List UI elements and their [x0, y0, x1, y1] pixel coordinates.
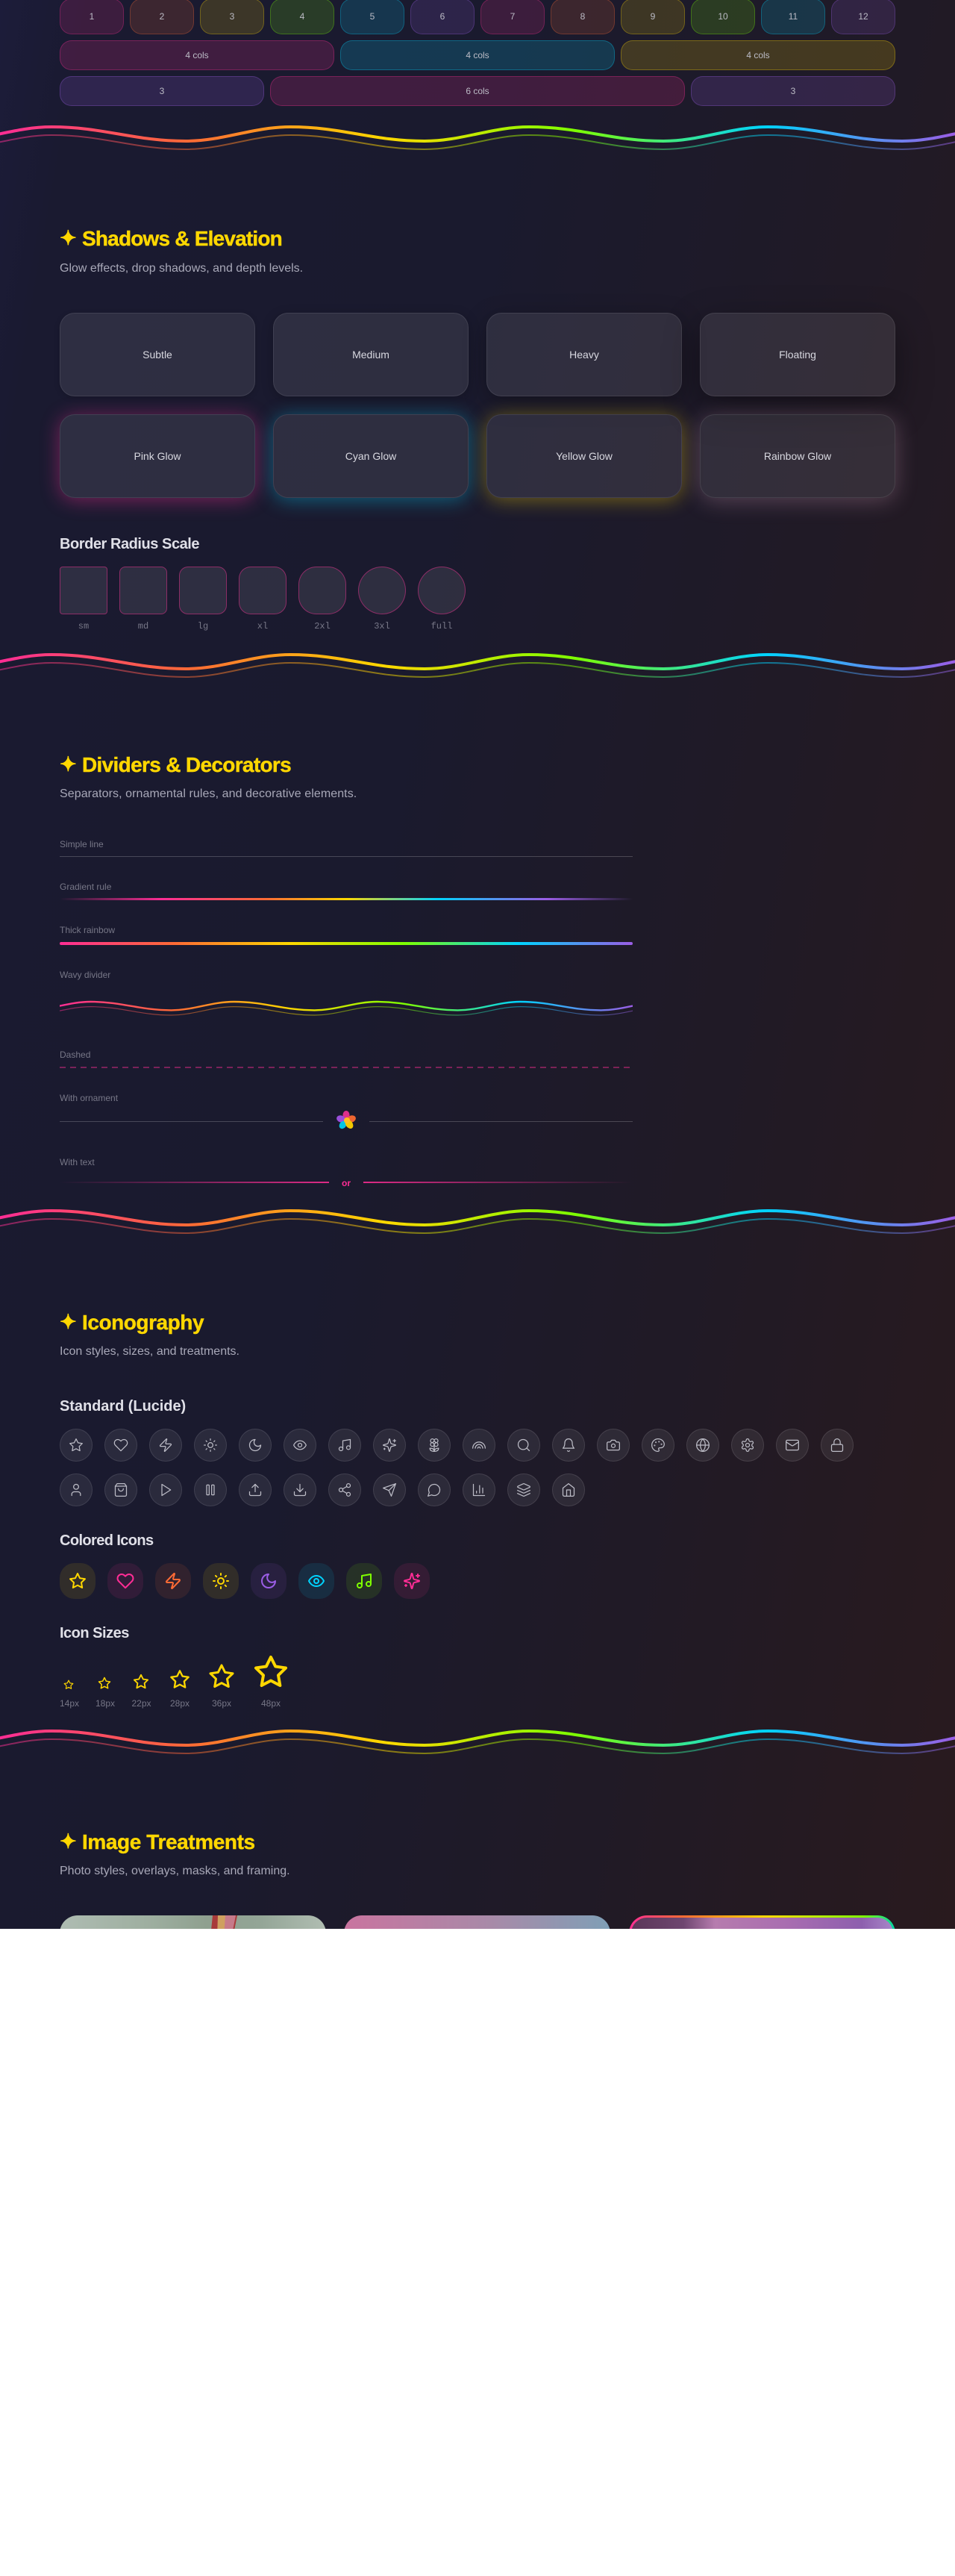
label 48px: 48px: [261, 1698, 281, 1709]
card: Pink Glow: Pink Glow: [134, 450, 181, 462]
radius label sm: sm: [78, 621, 89, 631]
icon: bar chart: [463, 1473, 495, 1506]
card: Heavy: [486, 313, 682, 396]
radius label full: full: [431, 621, 452, 631]
icon: home: [552, 1473, 585, 1506]
panel: border radius scale: [60, 567, 466, 631]
panel: grid columns demo: [60, 0, 895, 106]
colored icon: music: [346, 1563, 382, 1599]
colored icon: sparkles: [394, 1563, 430, 1599]
grid cell 3: 3: [230, 11, 234, 22]
icon: camera: [597, 1429, 630, 1462]
grid cell 8: 8: [580, 11, 585, 22]
icon: pause: [194, 1473, 227, 1506]
heading: Standard (Lucide): Standard (Lucide): [60, 1398, 186, 1415]
colored icon: star: [60, 1563, 96, 1599]
divider: thick rainbow: [60, 942, 633, 945]
divider: dashed: [60, 1067, 633, 1068]
icon: message circle: [418, 1473, 451, 1506]
heading: Dividers & Decorators: Dividers & Decorators: [82, 753, 291, 776]
grid cell 4: [270, 0, 334, 34]
label: wavy divider: Wavy divider: [60, 970, 110, 980]
grid cell 4 cols yellow: [621, 40, 895, 70]
icon: heart: [104, 1429, 137, 1462]
wavy section divider 1: [0, 125, 955, 150]
panel: icon sizes: [60, 1656, 287, 1709]
grid cell 9: 9: [651, 11, 655, 22]
grid cell 4 cols yellow: 4 cols: [746, 50, 770, 60]
subtitle: dividers: Separators, ornamental rules, and decorative elements.: [60, 788, 357, 800]
grid cell 3: [200, 0, 264, 34]
grid cell 1: 1: [90, 11, 94, 22]
grid cell 5: 5: [370, 11, 375, 22]
grid cell 2: [130, 0, 194, 34]
icon: zap: [149, 1429, 182, 1462]
label 28px: 28px: [170, 1698, 190, 1709]
icon: bell: [552, 1429, 585, 1462]
radius swatch full: [418, 567, 466, 614]
icon: music: [328, 1429, 361, 1462]
heading: Border Radius Scale: Border Radius Scale: [60, 536, 199, 552]
icon: shopping bag: [104, 1473, 137, 1506]
panel: shadow cards: [48, 313, 906, 512]
heading: Shadows & Elevation: Shadows & Elevation: [82, 227, 282, 250]
image card: natural photo: [60, 1915, 326, 2065]
radius swatch lg: [179, 567, 227, 614]
star 18px: [98, 1677, 110, 1688]
heading: Shadows & Elevation: ✦: [60, 227, 77, 250]
card: Yellow Glow: Yellow Glow: [556, 450, 613, 462]
subtitle: icons: Icon styles, sizes, and treatments.: [60, 1345, 239, 1358]
grid cell 12: [831, 0, 895, 34]
colored icon: sun: [203, 1563, 239, 1599]
icon: rainbow flower ornament: [336, 1111, 356, 1129]
icon: upload: [239, 1473, 272, 1506]
grid cell 1: [60, 0, 124, 34]
heading: Icon Sizes: Icon Sizes: [60, 1625, 129, 1641]
icon: palette: [642, 1429, 674, 1462]
icon: globe: [686, 1429, 719, 1462]
wavy section divider 4: [0, 1730, 955, 1754]
grid cell 6: 6: [440, 11, 445, 22]
icon: play: [149, 1473, 182, 1506]
colored icon: eye: [298, 1563, 334, 1599]
radius label xl: xl: [257, 621, 268, 631]
icon: moon: [239, 1429, 272, 1462]
heading: Iconography: Iconography: [82, 1311, 204, 1334]
card: Cyan Glow: Cyan Glow: [345, 450, 396, 462]
grid cell 3 right: [691, 76, 895, 106]
grid cell 9: [621, 0, 685, 34]
grid cell 7: 7: [510, 11, 515, 22]
divider: simple line: [60, 856, 633, 857]
star 14px: [64, 1680, 73, 1689]
card: Pink Glow: [60, 414, 255, 498]
radius swatch 2xl: [298, 567, 346, 614]
panel: standard icon grid: [60, 1429, 854, 1506]
subtitle: shadows: Glow effects, drop shadows, and depth levels.: [60, 262, 303, 275]
icon: sparkles: [373, 1429, 406, 1462]
divider text: or: or: [342, 1178, 351, 1188]
grid cell 6: [410, 0, 475, 34]
panel: colored icons: [60, 1563, 430, 1599]
card: Subtle: [60, 313, 255, 396]
subtitle: images: Photo styles, overlays, masks, and framing.: [60, 1865, 290, 1877]
card: Heavy: Heavy: [569, 349, 599, 361]
grid cell 12: 12: [858, 11, 868, 22]
divider: with ornament: [60, 1111, 633, 1129]
icon: mail: [776, 1429, 809, 1462]
grid cell 11: [761, 0, 825, 34]
star 48px: [254, 1656, 287, 1687]
grid cell 10: [691, 0, 755, 34]
grid cell 4: 4: [300, 11, 304, 22]
heading: Image Treatments: Image Treatments: [82, 1830, 255, 1853]
radius swatch 3xl: [358, 567, 406, 614]
image card: gradient overlay: [344, 1915, 610, 2065]
star 22px: [133, 1674, 149, 1688]
colored icon: moon: [251, 1563, 286, 1599]
grid cell 8: [551, 0, 615, 34]
radius label lg: lg: [198, 621, 208, 631]
card: Subtle: Subtle: [143, 349, 172, 361]
grid cell 4 cols pink: [60, 40, 334, 70]
icon: lock: [821, 1429, 854, 1462]
label 36px: 36px: [212, 1698, 231, 1709]
card: Floating: [700, 313, 895, 396]
grid cell 3 left: 3: [160, 86, 164, 96]
label: dashed: Dashed: [60, 1050, 90, 1060]
heading: Colored Icons: Colored Icons: [60, 1532, 154, 1549]
icon: layers: [507, 1473, 540, 1506]
label: thick rainbow: Thick rainbow: [60, 925, 115, 935]
icon: send: [373, 1473, 406, 1506]
icon: star: [60, 1429, 93, 1462]
grid cell 4 cols cyan: 4 cols: [466, 50, 489, 60]
heading: Iconography: ✦: [60, 1311, 77, 1334]
radius swatch sm: [60, 567, 107, 614]
grid cell 4 cols cyan: [340, 40, 615, 70]
grid cell 5: [340, 0, 404, 34]
grid cell 6 cols: [270, 76, 685, 106]
grid cell 3 left: [60, 76, 264, 106]
card: Cyan Glow: [273, 414, 469, 498]
divider: gradient rule: [60, 898, 633, 900]
colored icon: heart: [107, 1563, 143, 1599]
wavy section divider 2: [0, 653, 955, 678]
icon: user: [60, 1473, 93, 1506]
colored icon: zap: [155, 1563, 191, 1599]
star 36px: [209, 1664, 234, 1688]
radius label 3xl: 3xl: [374, 621, 390, 631]
grid cell 10: 10: [718, 11, 728, 22]
radius label 2xl: 2xl: [314, 621, 331, 631]
icon: eye: [284, 1429, 316, 1462]
card: Rainbow Glow: [700, 414, 895, 498]
star 28px: [170, 1670, 190, 1688]
icon: sun: [194, 1429, 227, 1462]
icon: share: [328, 1473, 361, 1506]
card: Medium: Medium: [352, 349, 389, 361]
framed photo: [631, 1918, 893, 2062]
image card: rainbow frame: [629, 1915, 895, 2065]
heading: Image Treatments: ✦: [60, 1830, 77, 1853]
card: Floating: Floating: [779, 349, 816, 361]
wavy section divider 3: [0, 1209, 955, 1234]
heading: Dividers & Decorators: ✦: [60, 753, 77, 776]
card: Rainbow Glow: Rainbow Glow: [764, 450, 831, 462]
radius swatch xl: [239, 567, 286, 614]
label: with ornament: With ornament: [60, 1093, 118, 1103]
card: Medium: [273, 313, 469, 396]
label: with text: With text: [60, 1157, 95, 1167]
label: gradient rule: Gradient rule: [60, 882, 111, 892]
label 22px: 22px: [131, 1698, 151, 1709]
icon: flower: [418, 1429, 451, 1462]
grid cell 6 cols: 6 cols: [466, 86, 489, 96]
label 14px: 14px: [60, 1698, 79, 1709]
photo subject: flower stem: [211, 1915, 237, 1929]
icon: rainbow: [463, 1429, 495, 1462]
label: simple line: Simple line: [60, 839, 104, 849]
grid cell 11: 11: [789, 11, 798, 22]
icon: settings: [731, 1429, 764, 1462]
grid cell 4 cols pink: 4 cols: [185, 50, 209, 60]
grid cell 2: 2: [160, 11, 164, 22]
radius swatch md: [119, 567, 167, 614]
label 18px: 18px: [96, 1698, 115, 1709]
grid cell 3 right: 3: [791, 86, 795, 96]
icon: download: [284, 1473, 316, 1506]
grid cell 7: [480, 0, 545, 34]
radius label md: md: [138, 621, 148, 631]
divider: wavy: [60, 1000, 633, 1016]
card: Yellow Glow: [486, 414, 682, 498]
icon: search: [507, 1429, 540, 1462]
